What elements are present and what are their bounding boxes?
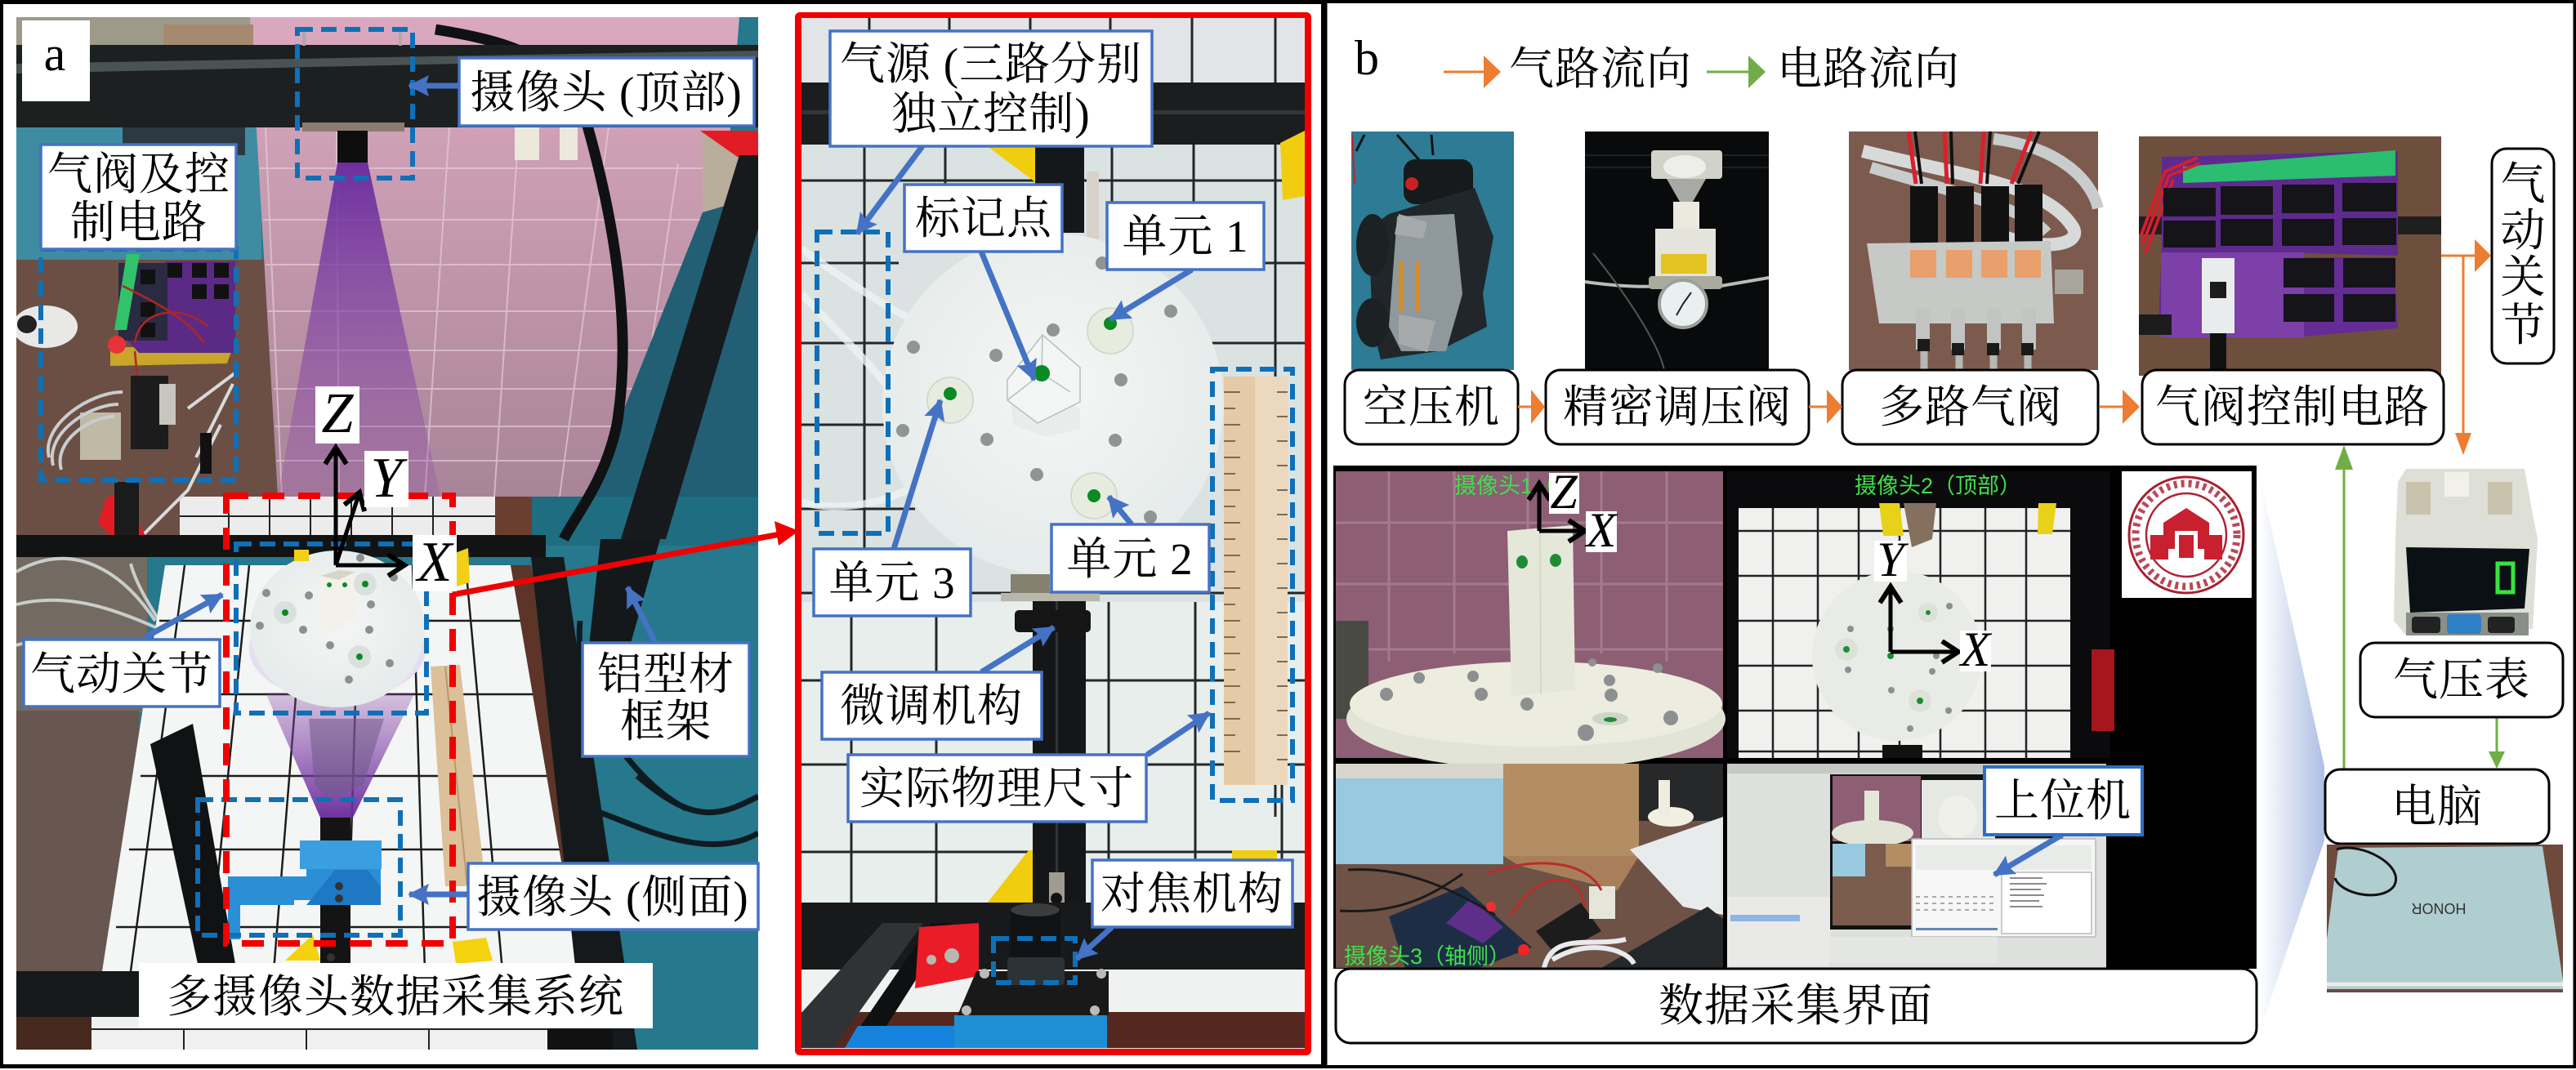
callout: unit 3 [814,400,971,616]
box: pneumatic joint: 气 [2500,159,2546,209]
dashed box: side camera [198,800,400,935]
callout: unit 2: 单元 2 [1066,534,1194,584]
box: valve control circuit: 气阀控制电路 [2155,382,2430,432]
arrow: compressor to regulator [1518,390,1545,424]
callout: air source: 气源 (三路分别 [840,39,1142,89]
callout: top camera: 摄像头 (顶部) [470,68,743,118]
callout: air source [830,31,1152,234]
callout: physical scale: 实际物理尺寸 [859,764,1134,814]
view: side camera [1336,471,1726,769]
callout: unit 1: 单元 1 [1122,212,1249,261]
axes: side view: X [1585,503,1618,557]
zoom projection: interface to computer [2259,474,2324,1033]
dashed box: focus mechanism [993,938,1075,983]
box: pressure gauge [2360,643,2563,717]
box: computer: 电脑 [2391,782,2483,831]
view: side camera: 摄像头1（侧 [1454,474,1577,498]
callout: fine adjustment: 微调机构 [840,681,1023,731]
callout: unit 3: 单元 3 [828,558,956,608]
panel label: a [22,20,90,101]
box: air compressor [1345,370,1518,444]
box: pneumatic joint [2492,149,2554,363]
view: top camera: 摄像头2（顶部） [1855,474,2021,498]
box: valve control circuit [2142,370,2444,444]
panel a2: zoomed detail photo with red border [798,16,1308,1052]
callout: pneumatic joint: 气动关节 [30,649,213,699]
box: pressure gauge: 气压表 [2393,655,2530,705]
dashed box: ruler [1212,369,1292,800]
photo: air compressor [1351,132,1514,370]
marker tower [1007,335,1080,437]
purple view cone: top camera [278,163,440,497]
axes: side view: Z [1550,465,1578,519]
coordinate axes: panel a: Y [371,447,408,510]
view: host computer interface [1727,764,2106,968]
view: top camera [1727,471,2114,758]
callout: focus mechanism: 对焦机构 [1100,869,1284,919]
axes: top view: X [1959,622,1993,676]
logo: Hunan University [2122,471,2252,598]
axes: top view [1874,533,1993,676]
photo: multi-way valve [1849,132,2098,370]
box: air compressor: 空压机 [1363,382,1500,432]
axes: top view: Y [1877,533,1909,586]
callout: unit 1 [1107,203,1264,319]
box: data acquisition interface: 数据采集界面 [1659,981,1933,1031]
callout: aluminium frame: 铝型材 [597,649,734,699]
arrow: regulator to valve [1809,390,1842,424]
callout: valve and control circuit [41,145,236,249]
dashed box: pneumatic joint [236,544,426,713]
callout: valve and control circuit: 制电路 [70,198,208,247]
photo: precision regulator [1585,132,1769,370]
photo: valve control circuit [2139,136,2441,376]
box: multi-way valve: 多路气阀 [1879,382,2062,432]
axes: side view [1539,465,1618,557]
panel a: experimental setup photo [12,17,758,1050]
panel: data acquisition interface [1333,465,2257,969]
red dashed box: zoom source region [226,496,453,943]
arrow: valve to circuit [2100,390,2140,424]
callout: air source: 独立控制) [891,89,1091,139]
photo: pressure gauge [2394,469,2538,635]
dashed box: air source [817,232,888,533]
view: lab desk camera [1336,764,1723,969]
legend: air path: 气路流向 [1509,44,1692,94]
callout: host computer: 上位机 [1994,776,2132,826]
panel label: b: b [1355,31,1379,85]
callout: top camera [409,58,754,126]
box: pneumatic joint: 节 [2500,301,2546,350]
arrow: computer to control circuit [2335,445,2353,769]
callout: marker: 标记点 [915,194,1052,243]
callout: aluminium frame: 框架 [620,697,712,747]
callout: host computer [1984,767,2142,875]
callout: physical scale [848,713,1209,822]
callout: focus mechanism [1077,860,1292,959]
panel frame: b [1325,2,2575,1067]
photo: laptop: HONOR [2412,900,2466,916]
dashed box: control circuit [41,249,236,480]
box: data acquisition interface [1336,969,2257,1043]
panel frame: a [2,2,1324,1067]
callout: pneumatic joint [24,595,222,707]
box: precision regulator [1546,370,1809,444]
callout: aluminium frame [583,587,749,756]
photo: laptop [2327,845,2563,992]
callout: side camera: 摄像头 (侧面) [476,872,749,922]
caption: multi-camera acquisition system [139,963,653,1028]
callout: marker [904,185,1062,380]
box: precision regulator: 精密调压阀 [1563,382,1792,432]
arrow: gauge to computer [2489,717,2505,769]
view: lab desk camera: 摄像头3（轴侧） [1344,944,1511,969]
caption: multi-camera acquisition system: 多摄像头数据采集系统 [167,972,624,1022]
coordinate axes: panel a: Z [322,382,355,445]
red zoom arrow [453,521,799,595]
box: computer [2325,769,2549,844]
panel label: a: a [44,27,65,81]
pneumatic units and screws [896,256,1177,524]
coordinate axes: panel a: X [415,531,455,594]
callout: fine adjustment [822,627,1054,739]
box: pneumatic joint: 动 [2500,206,2546,256]
callout: unit 2 [1051,497,1209,592]
legend: circuit path: 电路流向 [1777,44,1960,94]
coordinate axes: panel a [315,382,457,594]
callout: valve and control circuit: 气阀及控 [47,149,230,199]
box: pneumatic joint: 关 [2500,252,2546,302]
box: multi-way valve [1842,370,2098,444]
arrow: circuit to joint and pressure gauge [2441,239,2491,455]
callout: side camera [409,863,758,930]
dashed box: top camera [297,29,413,178]
